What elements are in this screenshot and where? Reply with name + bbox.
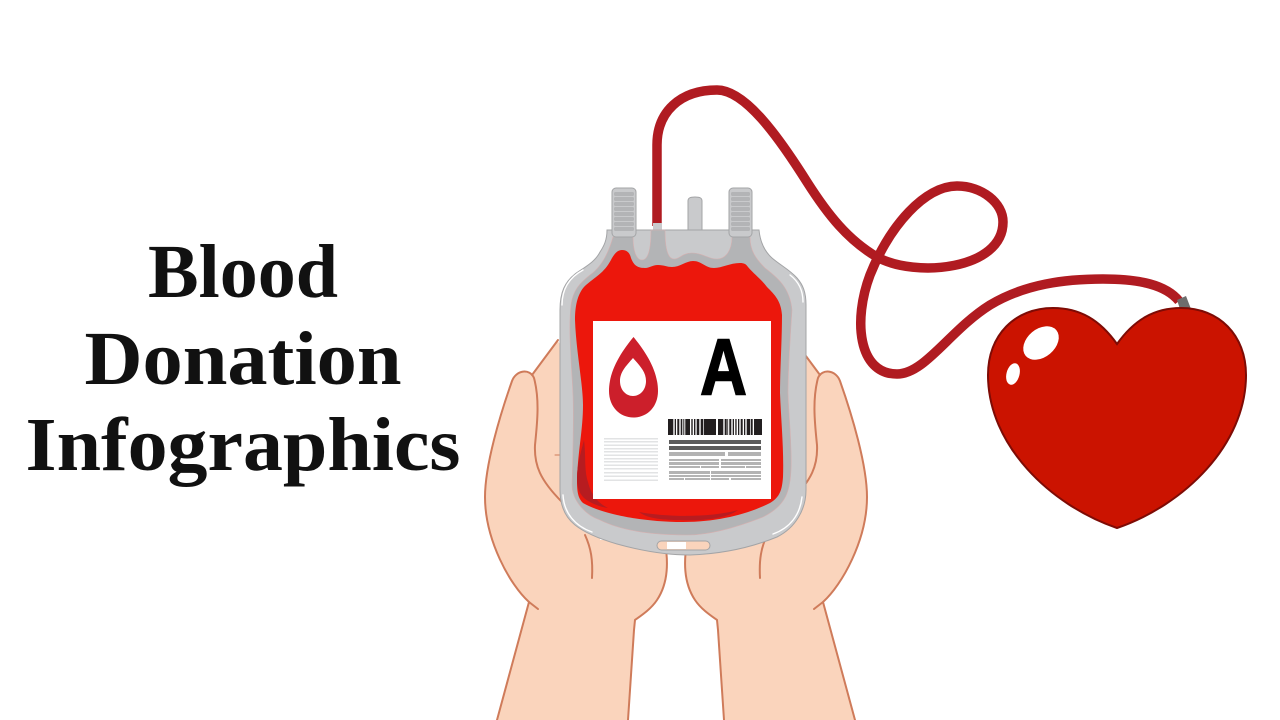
barcode [668, 419, 762, 435]
heart [988, 308, 1246, 528]
bag highlights [562, 270, 803, 534]
bag outer [560, 230, 806, 555]
blood fill [575, 250, 783, 522]
left hand [485, 340, 667, 720]
title: Infographics [26, 403, 460, 487]
bag port right [729, 188, 752, 237]
blood group letter: A [700, 322, 747, 412]
title [26, 230, 460, 487]
tube stub [653, 223, 662, 232]
title: Donation [84, 317, 402, 401]
blood bag [560, 188, 806, 555]
right hand [685, 340, 867, 720]
bag inner shade [570, 230, 792, 535]
title: Blood [148, 230, 338, 314]
label data lines [669, 440, 761, 480]
heart highlights [1004, 319, 1065, 386]
label small text lines [604, 438, 658, 481]
blood shade bottom [639, 510, 738, 520]
icon: blood drop [609, 337, 658, 418]
blood shade left [577, 440, 608, 508]
bag centre nub [688, 197, 702, 232]
tube connector [1177, 296, 1191, 309]
blood tube [657, 90, 1179, 374]
bag label [593, 321, 771, 499]
bag hanger slot [657, 541, 710, 550]
bag port left [612, 188, 636, 237]
